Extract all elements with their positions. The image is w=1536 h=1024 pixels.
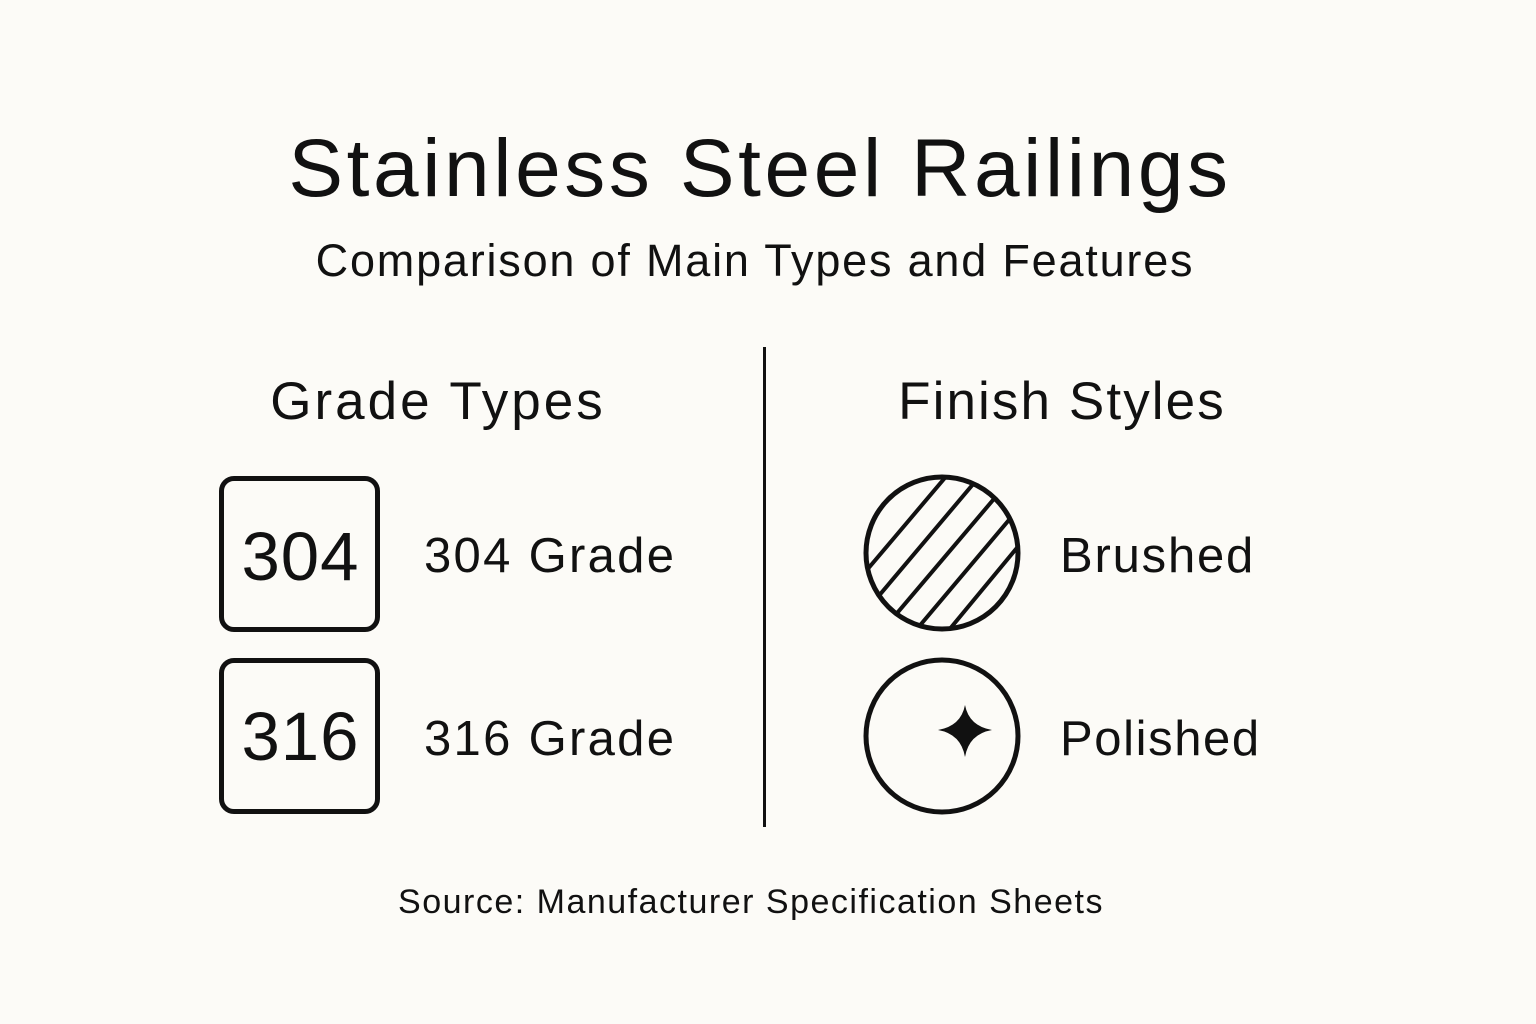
- panel: grade icons and labels: [219, 476, 676, 814]
- title: Stainless Steel Railings: [288, 123, 1232, 214]
- icon: brushed and polished circles: [864, 474, 1020, 814]
- subtitle: Comparison of Main Types and Features: [316, 235, 1194, 286]
- label: Polished: Polished: [1060, 712, 1261, 766]
- heading: grade types: Grade Types: [270, 372, 606, 431]
- panel: finish icons and labels: [864, 474, 1261, 814]
- divider line: [763, 347, 766, 827]
- icon: 316 box: 316: [241, 698, 360, 775]
- label: 304 Grade: 304 Grade: [424, 529, 676, 583]
- label: Brushed: Brushed: [1060, 529, 1255, 583]
- icon: 304 box: [219, 476, 380, 632]
- icon: 316 box: [219, 658, 380, 814]
- label: 316 Grade: 316 Grade: [424, 712, 676, 766]
- heading: finish styles: Finish Styles: [898, 372, 1226, 431]
- source note: Source: Manufacturer Specification Sheets: [398, 883, 1104, 921]
- icon: 304 box: 304: [241, 518, 360, 595]
